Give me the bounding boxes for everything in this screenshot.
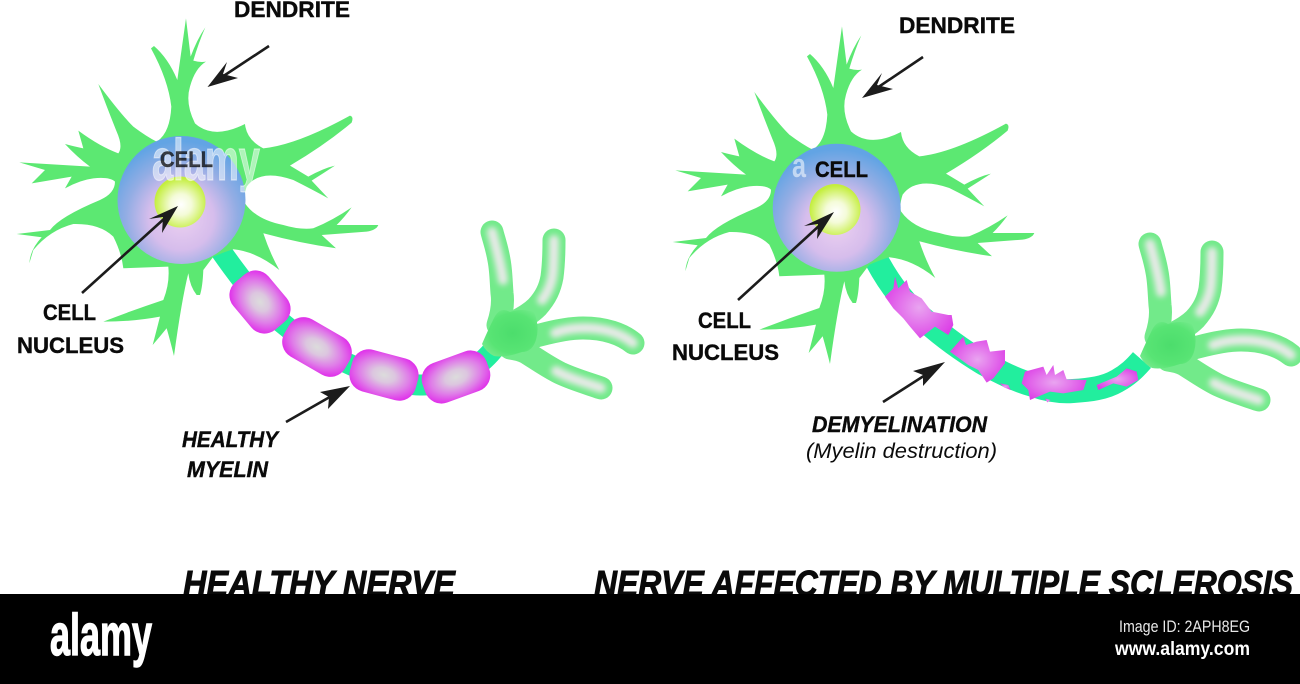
damaged neuron body with dendrites xyxy=(673,26,1034,364)
healthy axon xyxy=(212,238,493,385)
label: cell nucleus xyxy=(17,300,124,358)
label: healthy myelin: MYELIN xyxy=(187,457,269,482)
footer band xyxy=(0,594,1300,684)
label: healthy myelin: HEALTHY xyxy=(182,427,280,452)
label: dendrite: DENDRITE xyxy=(899,13,1015,38)
healthy axon terminal xyxy=(482,232,633,388)
cell nucleus xyxy=(810,184,860,235)
cell body xyxy=(118,136,246,264)
myelin sheaths xyxy=(222,263,495,408)
cell body xyxy=(773,144,901,272)
label: cell nucleus xyxy=(672,308,779,365)
label: cell: CELL xyxy=(160,147,213,172)
heading: healthy nerve: HEALTHY NERVE xyxy=(183,563,456,604)
label: healthy myelin xyxy=(182,427,280,482)
arrow to nucleus xyxy=(738,212,834,300)
arrow to dendrite xyxy=(208,46,269,87)
panel: healthy nerve xyxy=(17,0,633,604)
damaged axon terminal xyxy=(1140,244,1291,400)
watermark: alamy xyxy=(152,128,260,193)
arrow to nucleus xyxy=(82,206,178,293)
watermark fragment: a xyxy=(792,147,807,185)
damaged axon xyxy=(866,245,1142,391)
image id: Image ID: 2APH8EG xyxy=(1119,617,1250,636)
cell nucleus xyxy=(154,176,206,228)
arrow to dendrite xyxy=(862,57,923,98)
arrow to myelin xyxy=(286,386,350,422)
label: cell: CELL xyxy=(815,157,868,182)
label: cell nucleus: NUCLEUS xyxy=(672,340,779,365)
label: demyelination xyxy=(806,412,997,463)
destroyed myelin fragments xyxy=(885,277,1138,402)
label: cell nucleus: CELL xyxy=(698,308,751,333)
arrow to demyelination xyxy=(883,362,945,402)
website: www.alamy.com xyxy=(1114,639,1250,660)
label: cell nucleus: CELL xyxy=(43,300,96,325)
label: cell nucleus: NUCLEUS xyxy=(17,333,124,358)
healthy neuron body with dendrites xyxy=(17,18,378,356)
label: demyelination: DEMYELINATION xyxy=(812,412,988,437)
panel: nerve affected by multiple sclerosis xyxy=(594,13,1293,604)
label: demyelination: (Myelin destruction) xyxy=(806,440,997,463)
logo: alamy: alamy xyxy=(50,603,152,668)
